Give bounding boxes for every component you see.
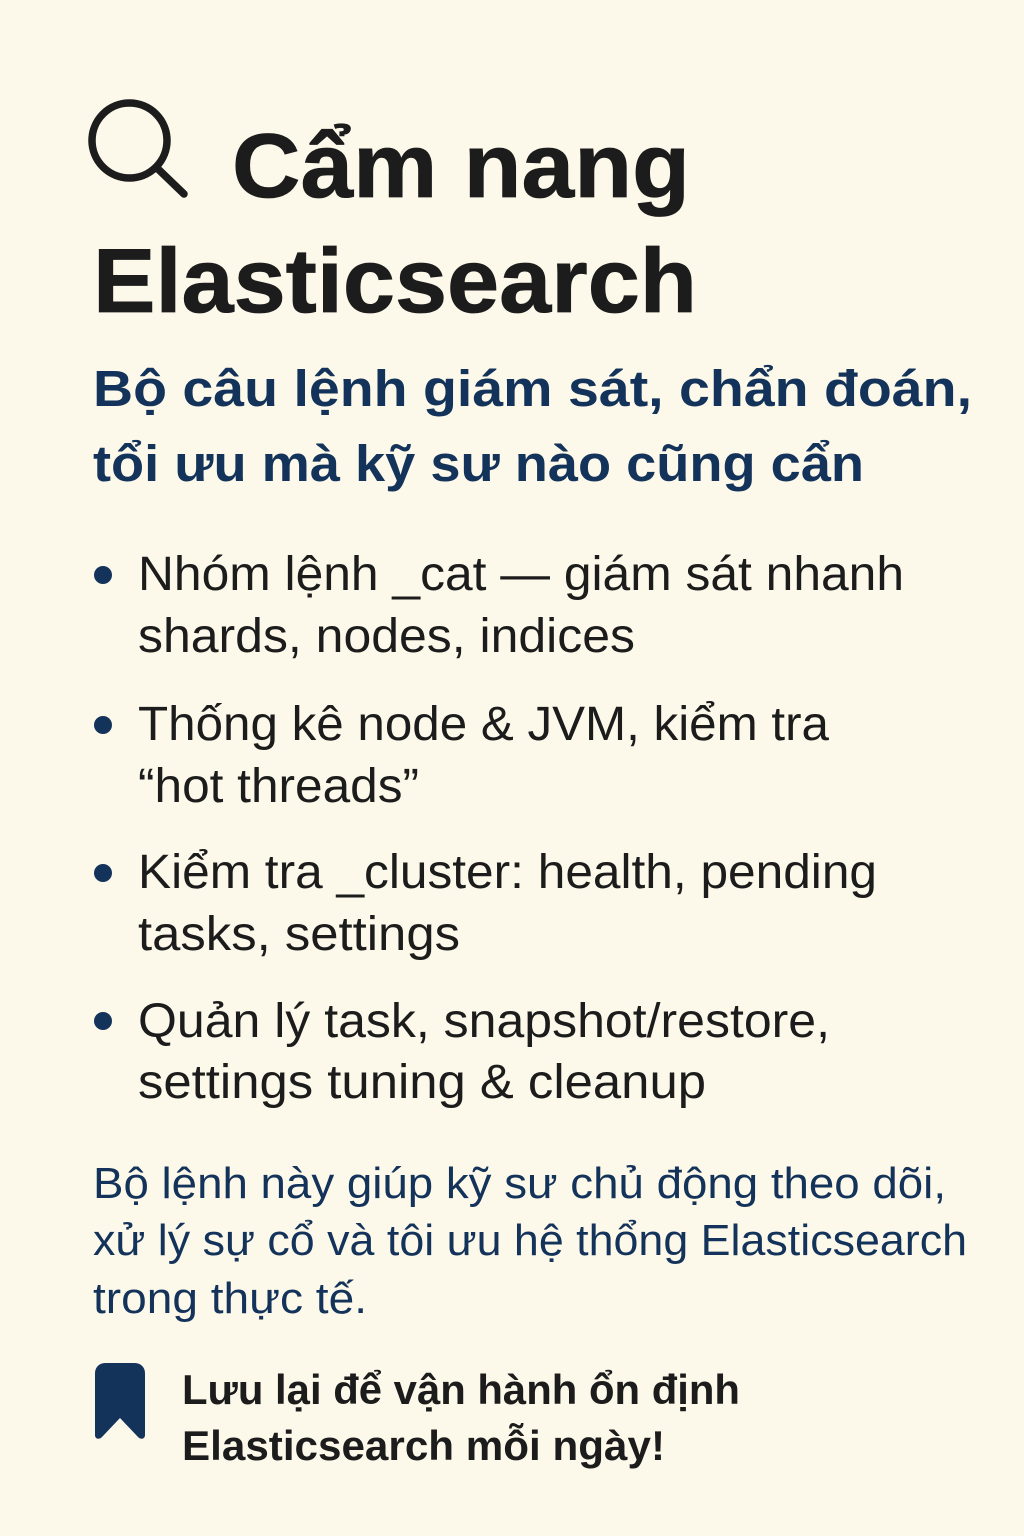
subtitle: tổi ưu mà kỹ sư nào cũng cẩn <box>93 435 864 492</box>
bullet 3 <box>94 846 877 961</box>
title: Elasticsearch <box>93 231 697 332</box>
call to action <box>182 1366 740 1469</box>
icon: magnifying glass <box>92 103 184 194</box>
bullet 1: shards, nodes, indices <box>138 610 635 663</box>
bullet 1: Nhóm lệnh _cat — giám sát nhanh <box>138 548 904 601</box>
summary paragraph: trong thực tế. <box>93 1274 367 1323</box>
bullet list <box>94 548 904 1109</box>
bullet 1 <box>94 548 904 663</box>
summary paragraph: xử lý sự cổ và tôi ưu hệ thổng Elasticsearch <box>93 1216 967 1265</box>
call to action: Elasticsearch mỗi ngày! <box>182 1421 665 1469</box>
title: Cẩm nang <box>232 116 690 217</box>
icon: bookmark <box>95 1363 145 1439</box>
bullet 4: settings tuning & cleanup <box>138 1056 706 1109</box>
title <box>93 116 697 332</box>
subtitle <box>93 360 972 492</box>
bullet 4 <box>94 995 830 1109</box>
bullet 3: Kiểm tra _cluster: health, pending <box>138 846 877 899</box>
bullet 2 <box>94 698 829 813</box>
summary paragraph: Bộ lệnh này giúp kỹ sư chủ động theo dõi, <box>93 1159 946 1208</box>
bullet 2: Thống kê node & JVM, kiểm tra <box>138 698 829 751</box>
summary paragraph <box>93 1159 967 1323</box>
subtitle: Bộ câu lệnh giám sát, chẩn đoán, <box>93 360 972 417</box>
call to action: Lưu lại để vận hành ổn định <box>182 1366 740 1413</box>
bullet 3: tasks, settings <box>138 908 460 961</box>
bullet 2: “hot threads” <box>138 760 419 813</box>
bullet 4: Quản lý task, snapshot/restore, <box>138 995 830 1048</box>
